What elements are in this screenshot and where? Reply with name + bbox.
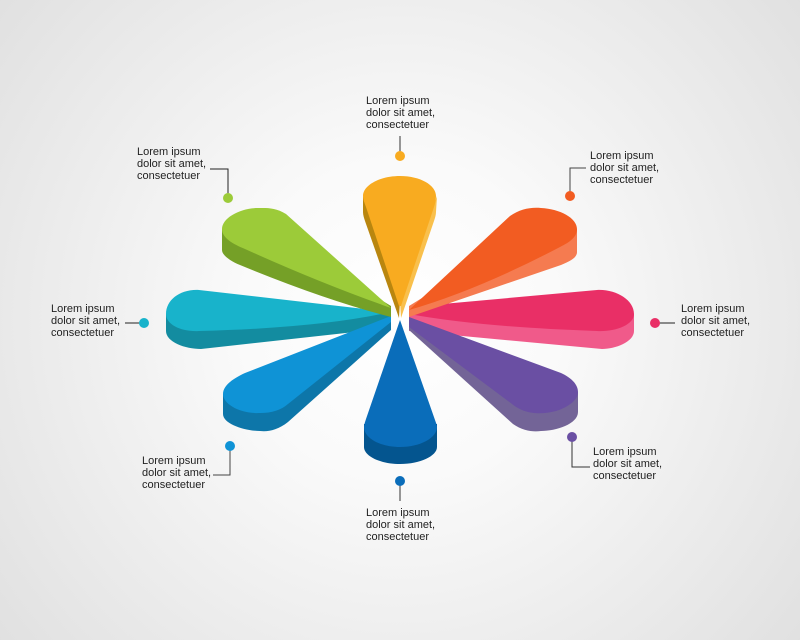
- callout: dark blue: dolor sit amet,: [366, 519, 435, 531]
- callout: blue left: consectetuer: [142, 479, 205, 491]
- petal: purple: [409, 317, 578, 431]
- callout: green: [137, 146, 233, 203]
- callout: orange: [565, 150, 659, 201]
- callout: purple: Lorem ipsum: [593, 446, 657, 458]
- callout: blue left: [142, 441, 235, 491]
- callout: purple: dolor sit amet,: [593, 458, 662, 470]
- petal: yellow: [363, 176, 437, 318]
- callout: teal: consectetuer: [51, 327, 114, 339]
- callout: orange: consectetuer: [590, 174, 653, 186]
- callout: blue left: Lorem ipsum: [142, 455, 206, 467]
- callout: dark blue: [366, 476, 435, 543]
- callout: yellow: Lorem ipsum: [366, 95, 430, 107]
- callout: green: consectetuer: [137, 170, 200, 182]
- petal: blue left: [223, 316, 391, 431]
- callout: yellow: dolor sit amet,: [366, 107, 435, 119]
- callout: teal: Lorem ipsum: [51, 303, 115, 315]
- callout: blue left: dolor sit amet,: [142, 467, 211, 479]
- callout: dark blue: consectetuer: [366, 531, 429, 543]
- callout: pink: consectetuer: [681, 327, 744, 339]
- callout: pink: [650, 303, 750, 339]
- callout: green: Lorem ipsum: [137, 146, 201, 158]
- petal: orange: [409, 208, 577, 317]
- petal: green: [222, 208, 391, 317]
- petal: teal: [166, 290, 391, 349]
- callout: green: dolor sit amet,: [137, 158, 206, 170]
- callout: yellow: [366, 95, 435, 161]
- callout: teal: [51, 303, 149, 339]
- callout: pink: dolor sit amet,: [681, 315, 750, 327]
- callout: purple: [567, 432, 662, 482]
- callout: dark blue: Lorem ipsum: [366, 507, 430, 519]
- callout: orange: Lorem ipsum: [590, 150, 654, 162]
- petal: pink: [409, 290, 634, 349]
- callout: purple: consectetuer: [593, 470, 656, 482]
- callout: yellow: consectetuer: [366, 119, 429, 131]
- callout: pink: Lorem ipsum: [681, 303, 745, 315]
- callout: orange: dolor sit amet,: [590, 162, 659, 174]
- petal: dark blue: [364, 320, 437, 464]
- callout: teal: dolor sit amet,: [51, 315, 120, 327]
